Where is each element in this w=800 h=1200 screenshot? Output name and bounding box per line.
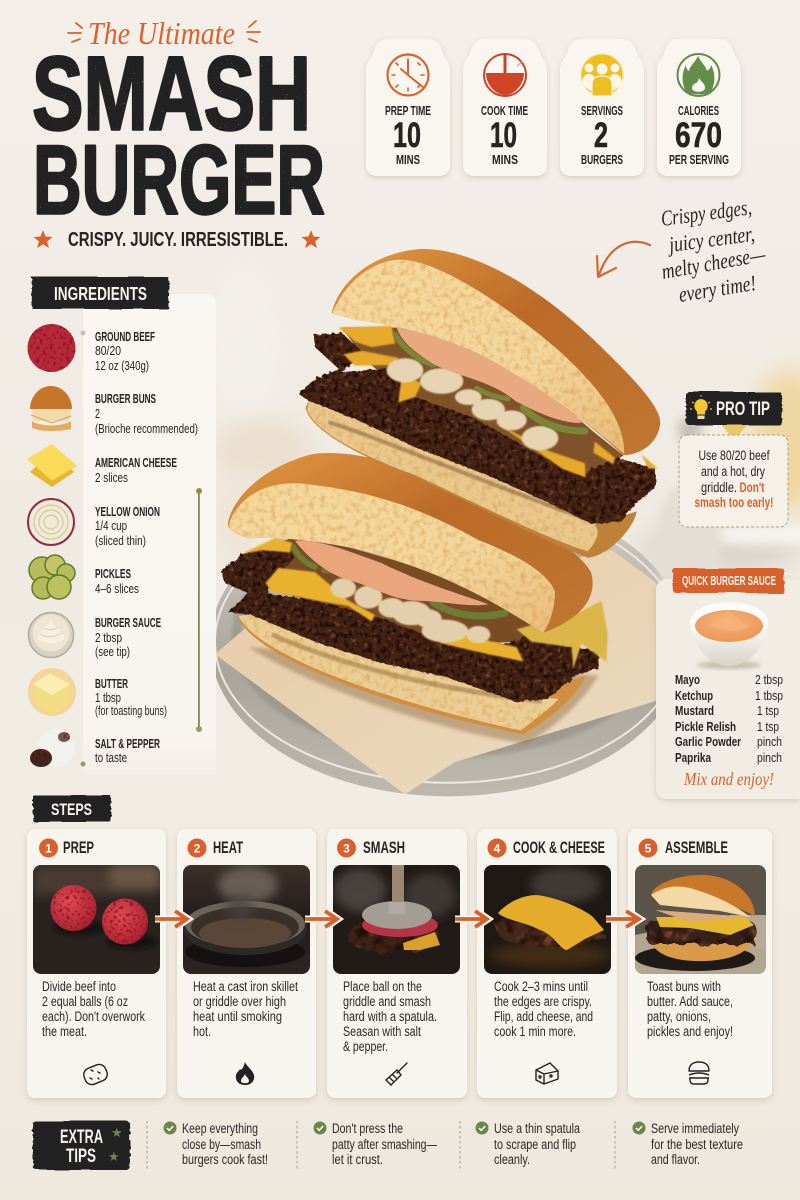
- icon: clock: [388, 54, 428, 96]
- step 3 text: [343, 979, 437, 1054]
- ingredient: pickles: 4–6 slices: [95, 582, 139, 596]
- step 4 text: the edges are crispy.: [494, 994, 592, 1009]
- photo: beef balls: [33, 865, 160, 974]
- icon: pot: [484, 54, 526, 96]
- tagline: CRISPY. JUICY. IRRESISTIBLE.: [68, 229, 288, 251]
- arrow: step 2 to 3: [305, 910, 338, 928]
- ingredient: burger sauce: (see tip): [95, 645, 130, 659]
- heading: ingredients: [32, 277, 169, 309]
- photo: melted cheese patty: [484, 865, 611, 974]
- arrow: callout to burger: [597, 242, 650, 277]
- step 3 text: Place ball on the: [343, 979, 422, 994]
- title SMASH BURGER: [32, 36, 325, 234]
- extra tips dividers: [147, 1121, 615, 1170]
- pro tip text: Use 80/20 beef: [698, 448, 770, 463]
- tip 1: burgers cook fast!: [182, 1152, 268, 1167]
- step 5 text: [647, 979, 733, 1039]
- parchment paper: [215, 550, 657, 794]
- handwritten callout: Crispy edges,: [659, 194, 753, 231]
- title SMASH BURGER: BURGER: [33, 124, 325, 234]
- burger shadow on paper: [248, 647, 598, 744]
- step 3 text: & pepper.: [343, 1039, 388, 1054]
- hero burger photo: [209, 249, 800, 796]
- bottom burger filling shade: [242, 538, 543, 645]
- ingredient: american cheese: 2 slices: [95, 471, 128, 485]
- arrow: step 4 to 5: [606, 910, 640, 928]
- tip 3: to scrape and flip: [494, 1137, 576, 1152]
- handwritten callout: juicy center,: [665, 221, 756, 257]
- ingredient: yellow onion: YELLOW ONION: [95, 505, 160, 519]
- sauce table: 1 tsp: [757, 703, 779, 718]
- heading: steps: [33, 795, 111, 822]
- tip 3: [476, 1121, 580, 1167]
- panel: ingredients: [27, 277, 216, 775]
- top burger bottom bun: [306, 401, 637, 558]
- sauce table: Paprika: [675, 750, 712, 765]
- sauce table: 1 tbsp: [755, 688, 783, 703]
- tip 1: close by—smash: [182, 1137, 261, 1152]
- sauce table: Garlic Powder: [675, 734, 741, 749]
- plate: [210, 483, 722, 796]
- icon: flame: [678, 54, 720, 96]
- handwritten callout: [659, 194, 768, 307]
- extra tips label: EXTRA: [60, 1127, 103, 1148]
- heading: steps: STEPS: [51, 800, 92, 819]
- top burger patty: [298, 333, 656, 524]
- ingredient: burger buns: (Brioche recommended): [95, 422, 198, 436]
- step 5 card: assemble: ASSEMBLE: [665, 838, 728, 857]
- ingredient: butter: 1 tbsp: [95, 691, 121, 705]
- stat card: prep time: [366, 39, 450, 176]
- sauce table: Mayo: [675, 672, 700, 687]
- handwritten callout: melty cheese—: [660, 241, 768, 284]
- ingredient: american cheese: AMERICAN CHEESE: [95, 456, 177, 470]
- step 4 text: [494, 979, 593, 1039]
- ingredient: burger buns: [30, 386, 198, 436]
- ingredient: pickles: PICKLES: [95, 567, 131, 581]
- bottom burger patty: [222, 547, 598, 701]
- top burger onions: [387, 358, 558, 450]
- extra tips label: ★: [111, 1125, 123, 1140]
- pro tip text: [694, 448, 774, 510]
- bottom burger cheese: [242, 538, 608, 669]
- photo: finished burger: [635, 865, 766, 974]
- icon: people: [580, 54, 624, 96]
- sauce table: 2 tbsp: [755, 672, 783, 687]
- stat card: servings: BURGERS: [581, 153, 623, 167]
- bottom burger: [222, 453, 608, 735]
- handwritten callout: every time!: [677, 270, 758, 307]
- top burger cheese: [338, 326, 658, 477]
- step 2 card: heat: HEAT: [213, 838, 243, 857]
- pro tip text: and a hot, dry: [701, 464, 765, 479]
- pro tip panel: [679, 435, 788, 527]
- stat card: prep time: MINS: [396, 153, 420, 167]
- top burger: [298, 249, 660, 558]
- ingredient: ground beef: [28, 324, 155, 373]
- stat card: prep time: PREP TIME: [385, 104, 431, 118]
- sauce heading: [673, 568, 784, 593]
- stat card: cook time: 10: [490, 116, 517, 155]
- ingredient: burger sauce: BURGER SAUCE: [95, 616, 161, 630]
- ingredient: american cheese: [27, 444, 177, 487]
- ingredient: yellow onion: 1/4 cup: [95, 519, 127, 533]
- step 1 card: prep: PREP: [63, 838, 94, 857]
- top burger upper bun: [332, 249, 660, 455]
- title block: [32, 15, 325, 251]
- step 2 text: Heat a cast iron skillet: [193, 979, 298, 994]
- tip 4: Serve immediately: [651, 1121, 739, 1136]
- ingredient: yellow onion: (sliced thin): [95, 534, 146, 548]
- tip 4: for the best texture: [651, 1137, 743, 1152]
- tip 4: and flavor.: [651, 1152, 700, 1167]
- icon: sauce bowl: [690, 602, 768, 669]
- step 3 text: griddle and smash: [343, 994, 431, 1009]
- step 1 text: each). Don't overwork: [42, 1009, 145, 1024]
- top burger pickles: [395, 335, 585, 431]
- stat card: cook time: [463, 39, 547, 176]
- stat card: servings: [560, 39, 644, 176]
- step 2 text: hot.: [193, 1024, 211, 1039]
- ingredient: butter: BUTTER: [95, 677, 128, 691]
- step 5 text: Toast buns with: [647, 979, 721, 994]
- sauce table: 1 tsp: [757, 719, 779, 734]
- ingredient: burger sauce: [28, 612, 161, 659]
- top burger sauce: [397, 327, 582, 423]
- step 2 text: or griddle over high: [193, 994, 286, 1009]
- step 4 text: Cook 2–3 mins until: [494, 979, 588, 994]
- step 3 card: smash: SMASH: [363, 838, 405, 857]
- extra tips label: ★: [108, 1149, 120, 1164]
- pro tip text: griddle.: [701, 480, 737, 495]
- step 1 text: [42, 979, 145, 1039]
- tip 2: let it crust.: [332, 1152, 383, 1167]
- extra tips label: [33, 1121, 130, 1170]
- ingredient: pickles: [29, 555, 139, 599]
- step 4 text: Flip, add cheese, and: [494, 1009, 593, 1024]
- bottom burger sauce: [295, 540, 488, 605]
- vine line: [196, 488, 202, 732]
- arrow: step 1 to 2: [155, 910, 188, 928]
- sauce table: Mustard: [675, 703, 714, 718]
- panel: quick burger sauce: [656, 568, 800, 799]
- step 3 text: hard with a spatula.: [343, 1009, 437, 1024]
- tip 2: patty after smashing—: [332, 1137, 437, 1152]
- step 4 text: cook 1 min more.: [494, 1024, 576, 1039]
- blurred backdrop: [209, 270, 800, 645]
- mix and enjoy note: Mix and enjoy!: [683, 769, 774, 789]
- tip 1: Keep everything: [182, 1121, 258, 1136]
- step 4 card: cook and cheese: COOK & CHEESE: [513, 838, 605, 857]
- arrow: step 3 to 4: [455, 910, 488, 928]
- bottom burger lower bun: [238, 615, 586, 735]
- step 5 card: assemble: 5: [645, 842, 652, 856]
- extra tips label: TIPS: [66, 1146, 96, 1167]
- tip 3: Use a thin spatula: [494, 1121, 580, 1136]
- step 1 card: prep: [27, 829, 166, 1098]
- heading: ingredients: INGREDIENTS: [54, 283, 147, 304]
- step 4 card: cook and cheese: [477, 829, 617, 1098]
- step 1 text: Divide beef into: [42, 979, 116, 994]
- step 1 card: prep: 1: [45, 842, 52, 856]
- icon: burger: [689, 1062, 709, 1084]
- stat card: servings: SERVINGS: [581, 104, 623, 118]
- step 1 text: 2 equal balls (6 oz: [42, 994, 128, 1009]
- ingredient: ground beef: 80/20: [95, 344, 121, 358]
- ingredient: burger sauce: 2 tbsp: [95, 631, 122, 645]
- step 5 card: assemble: [628, 829, 772, 1098]
- ingredient: salt and pepper: to taste: [95, 751, 127, 765]
- photo: smashing patty: [333, 865, 460, 974]
- ingredient: butter: [28, 668, 167, 718]
- stat card: calories: PER SERVING: [669, 153, 729, 167]
- step 5 text: patty, onions,: [647, 1009, 711, 1024]
- sauce table: pinch: [757, 750, 782, 765]
- stat card: cook time: MINS: [492, 153, 518, 167]
- tip 2: Don't press the: [332, 1121, 403, 1136]
- stat card: calories: CALORIES: [678, 104, 719, 118]
- stat card: cook time: COOK TIME: [481, 104, 528, 118]
- tip 3: cleanly.: [494, 1152, 530, 1167]
- pro tip label: PRO TIP: [716, 399, 770, 420]
- tip 4: [632, 1121, 743, 1167]
- pro tip text: smash too early!: [694, 495, 774, 510]
- step 3 card: smash: [327, 829, 467, 1098]
- bottom burger pickles: [293, 547, 505, 616]
- step 2 card: heat: [177, 829, 316, 1098]
- stat card: calories: [657, 39, 741, 176]
- ingredient: yellow onion: [28, 499, 160, 548]
- stat card: servings: 2: [594, 116, 608, 155]
- icon: dough ball: [82, 1062, 109, 1087]
- bottom burger onions: [331, 578, 490, 643]
- title SMASH BURGER: SMASH: [32, 36, 311, 152]
- stat card: calories: 670: [675, 116, 722, 155]
- ingredient: ground beef: GROUND BEEF: [95, 330, 155, 344]
- step 2 text: [193, 979, 298, 1039]
- icon: spatula: [386, 1063, 407, 1085]
- step 1 text: the meat.: [42, 1024, 87, 1039]
- ingredient: butter: (for toasting buns): [95, 704, 167, 718]
- icon: cheese cube: [536, 1063, 558, 1084]
- tip 2: [314, 1121, 437, 1167]
- step 3 text: Seasan with salt: [343, 1024, 421, 1039]
- step 5 text: butter. Add sauce,: [647, 994, 733, 1009]
- ingredient: burger buns: 2: [95, 407, 100, 421]
- icon: flame: [236, 1062, 254, 1085]
- pro tip: [678, 392, 788, 527]
- stat card: prep time: 10: [393, 116, 421, 155]
- step 2 card: heat: 2: [194, 842, 201, 856]
- sauce table: [675, 672, 783, 765]
- title script line: The Ultimate: [88, 15, 235, 51]
- step 4 card: cook and cheese: 4: [494, 842, 501, 856]
- sauce table: Ketchup: [675, 688, 713, 703]
- ingredient: salt and pepper: SALT & PEPPER: [95, 737, 160, 751]
- ingredient: ground beef: 12 oz (340g): [95, 359, 149, 373]
- ingredient: salt and pepper: [30, 729, 160, 767]
- sauce table: Pickle Relish: [675, 719, 736, 734]
- photo: skillet: [183, 865, 310, 974]
- step 5 text: pickles and enjoy!: [647, 1024, 733, 1039]
- step 3 card: smash: 3: [343, 842, 350, 856]
- pro tip text: Don't: [740, 480, 765, 495]
- tip 1: [164, 1121, 268, 1167]
- sauce table: pinch: [757, 734, 782, 749]
- top burger filling shade: [342, 327, 623, 479]
- step 2 text: heat until smoking: [193, 1009, 282, 1024]
- ingredient: burger buns: BURGER BUNS: [95, 392, 156, 406]
- bottom burger upper bun: [228, 453, 593, 633]
